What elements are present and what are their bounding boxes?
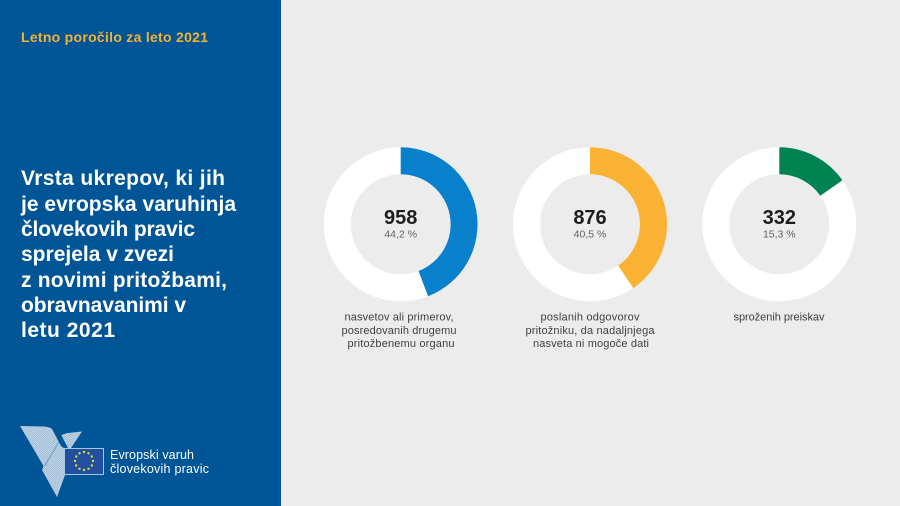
text: organisation name: Evropski varuh — [110, 448, 194, 462]
percentage: 15,3 %: 15,3 % — [763, 228, 796, 240]
chart: donut 40.5 percent — [526, 147, 667, 288]
label: advice or cases forwarded: pritožbenemu organu — [348, 338, 454, 350]
icon: stylised Y emblem — [20, 426, 82, 497]
label: advice or cases forwarded: posredovanih drugemu — [342, 325, 456, 337]
label: replies sent to complainant — [526, 312, 655, 350]
label: replies sent to complainant: pritožniku, da nadaljnjega — [526, 325, 655, 337]
label: investigations opened: sproženih preiskav — [734, 312, 825, 324]
title: človekovih pravic — [21, 218, 195, 241]
heading: report name: Letno poročilo za leto 2021 — [21, 29, 208, 45]
text: organisation name — [110, 448, 209, 476]
value: 332: 332 — [763, 207, 796, 229]
label: advice or cases forwarded — [342, 312, 456, 350]
label: replies sent to complainant: nasveta ni mogoče dati — [533, 338, 649, 350]
chart: donut 15.3 percent — [716, 147, 843, 288]
panel: donut 876 — [526, 147, 667, 350]
label: replies sent to complainant: poslanih odgovorov — [540, 312, 640, 324]
panel: donut 332 — [716, 147, 843, 324]
panel: left blue sidebar — [0, 0, 281, 506]
title: sprejela v zvezi — [21, 243, 174, 266]
value: 958: 958 — [384, 207, 417, 229]
title: je evropska varuhinja — [20, 193, 236, 216]
title: letu 2021 — [21, 319, 115, 342]
title: z novimi pritožbami, — [21, 269, 227, 292]
label: advice or cases forwarded: nasvetov ali primerov, — [344, 312, 454, 324]
percentage: 40,5 %: 40,5 % — [574, 228, 606, 240]
percentage: 44,2 %: 44,2 % — [384, 228, 417, 240]
logo: European Ombudsman — [20, 426, 209, 497]
icon: EU flag — [64, 448, 104, 474]
title: Vrsta ukrepov, ki jih — [21, 167, 225, 190]
value: 876: 876 — [573, 207, 607, 229]
panel: donut 958 — [337, 147, 478, 350]
text: organisation name: človekovih pravic — [110, 462, 209, 476]
chart: donut 44.2 percent — [337, 147, 478, 296]
title — [20, 167, 236, 342]
title: obravnavanimi v — [21, 294, 186, 317]
